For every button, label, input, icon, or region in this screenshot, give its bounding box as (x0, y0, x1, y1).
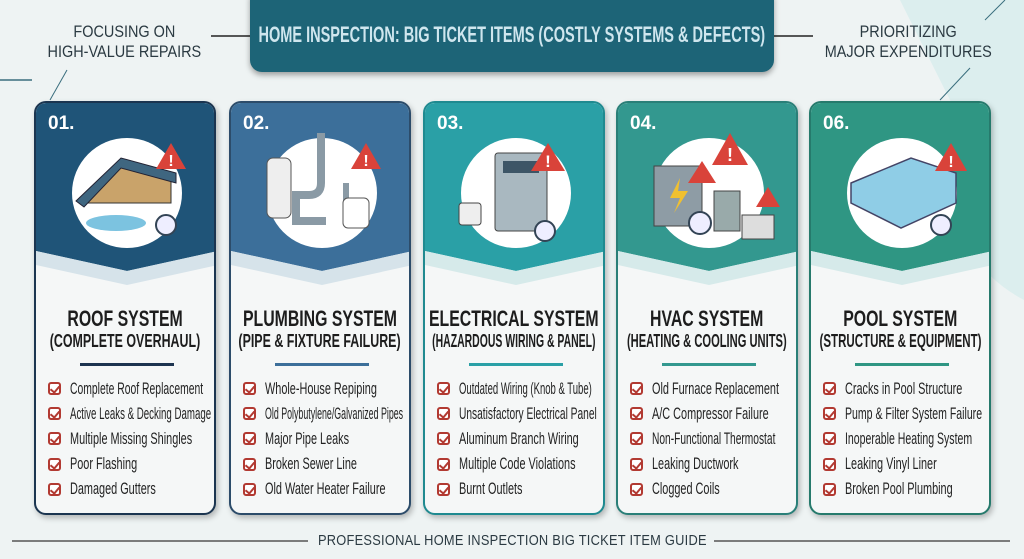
panel: electrical: Unsatisfactory Electrical Panel (459, 404, 597, 423)
panel: roof: (COMPLETE OVERHAUL) (50, 331, 200, 351)
panel: electrical (423, 101, 605, 515)
panel: plumbing: Broken Sewer Line (265, 454, 357, 473)
panel: hvac: ! (727, 145, 733, 165)
panel: hvac: A/C Compressor Failure (652, 404, 769, 423)
panel: roof (34, 101, 216, 515)
panel: roof: Damaged Gutters (70, 479, 156, 498)
panel: plumbing (229, 101, 411, 515)
panel: hvac (616, 101, 798, 515)
panel: plumbing: Major Pipe Leaks (265, 429, 349, 448)
panel: hvac: Old Furnace Replacement (652, 379, 779, 398)
title (250, 0, 774, 72)
panel: electrical: ! (545, 152, 551, 171)
panel: roof: Active Leaks & Decking Damage (70, 404, 211, 423)
panel: pool: (STRUCTURE & EQUIPMENT) (819, 331, 981, 351)
panel: pool: ! (948, 154, 954, 171)
panel: roof: 01. (48, 113, 74, 134)
panel: electrical: 03. (437, 113, 463, 134)
panel: hvac: 04. (630, 113, 656, 134)
panel: roof: Poor Flashing (70, 454, 137, 473)
footer: PROFESSIONAL HOME INSPECTION BIG TICKET ITEM GUIDE (318, 532, 706, 549)
side text right: MAJOR EXPENDITURES (824, 42, 991, 61)
panel: pool: Pump & Filter System Failure (845, 404, 982, 423)
panel: pool: 06. (823, 113, 849, 134)
panel: electrical: Multiple Code Violations (459, 454, 576, 473)
panel: pool: Cracks in Pool Structure (845, 379, 962, 398)
panel: electrical: Burnt Outlets (459, 479, 522, 498)
title: HOME INSPECTION: BIG TICKET ITEMS (COSTLY SYSTEMS & DEFECTS) (259, 22, 765, 47)
panel: hvac: Leaking Ductwork (652, 454, 738, 473)
panel: pool: Inoperable Heating System (845, 429, 972, 448)
side text right (824, 22, 992, 61)
side text left (47, 22, 201, 61)
panel: roof: Complete Roof Replacement (70, 379, 203, 398)
panel: plumbing: Old Polybutylene/Galvanized Pipes (265, 404, 403, 423)
panel: hvac: Non-Functional Thermostat (652, 429, 775, 448)
panel: plumbing: (PIPE & FIXTURE FAILURE) (239, 331, 401, 351)
panel: electrical: ELECTRICAL SYSTEM (429, 306, 599, 331)
panel: hvac: (HEATING & COOLING UNITS) (627, 331, 787, 351)
panel: electrical: (HAZARDOUS WIRING & PANEL) (432, 331, 596, 351)
panel: pool: Leaking Vinyl Liner (845, 454, 937, 473)
panel: hvac: HVAC SYSTEM (650, 306, 764, 331)
panel: plumbing: PLUMBING SYSTEM (243, 306, 397, 331)
panel: pool (809, 101, 991, 515)
panel: roof: ROOF SYSTEM (67, 306, 183, 331)
panel: plumbing: Whole-House Repiping (265, 379, 377, 398)
panel: pool: POOL SYSTEM (843, 306, 957, 331)
side text right: PRIORITIZING (859, 22, 957, 41)
panel: electrical: Aluminum Branch Wiring (459, 429, 579, 448)
side text left: HIGH-VALUE REPAIRS (47, 42, 201, 61)
panel: pool: Broken Pool Plumbing (845, 479, 953, 498)
panel: plumbing: 02. (243, 113, 269, 134)
panel: hvac: Clogged Coils (652, 479, 720, 498)
panel: roof: ! (168, 153, 174, 170)
side text left: FOCUSING ON (73, 22, 175, 41)
panel: plumbing: Old Water Heater Failure (265, 479, 386, 498)
panel: electrical: Outdated Wiring (Knob & Tube) (459, 379, 592, 398)
panel: plumbing: ! (363, 153, 369, 170)
panel: roof: Multiple Missing Shingles (70, 429, 192, 448)
